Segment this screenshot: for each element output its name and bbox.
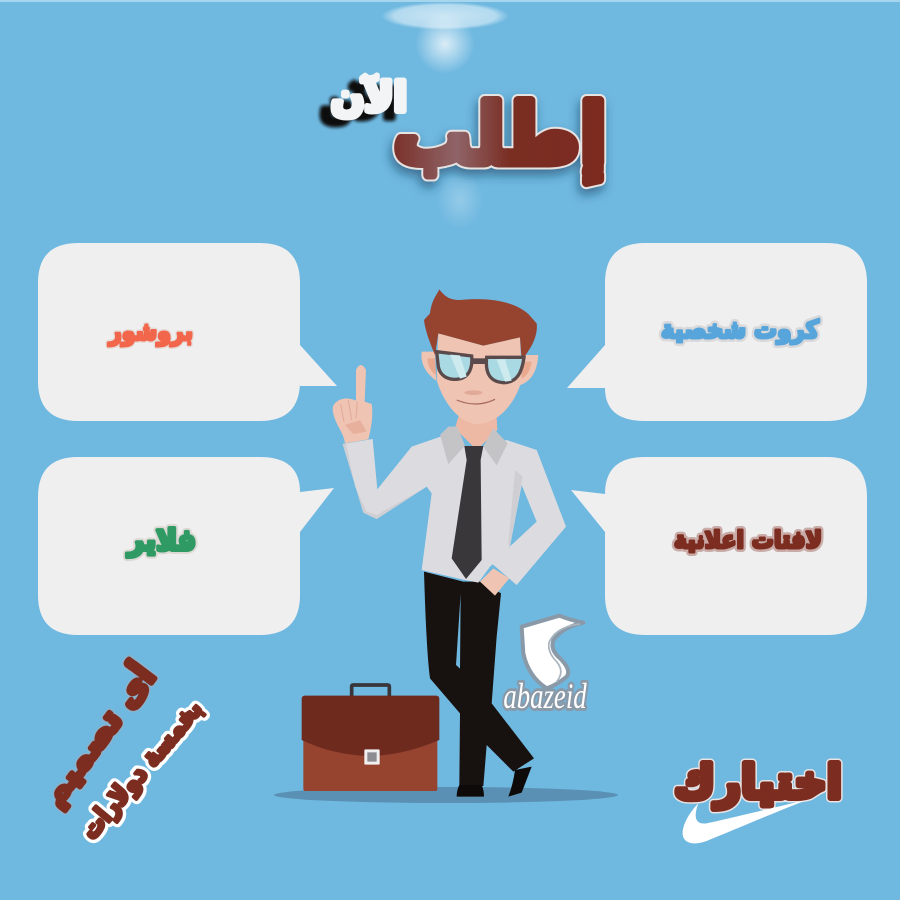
pocket hand: [480, 568, 509, 596]
flyer label: فلاير: [126, 523, 196, 557]
spotlight: [381, 2, 509, 230]
logo wordmark: abazeid: [503, 676, 587, 716]
man legs: [424, 572, 534, 797]
title shadow word: الآن: [320, 82, 396, 128]
pointing hand: [333, 365, 372, 443]
slogan: any design: أى تصميم: [31, 656, 163, 813]
flyer label: فلاير: [126, 523, 196, 557]
nose: [464, 390, 482, 395]
collar: [440, 427, 465, 464]
neck: [455, 417, 497, 450]
shirt: [343, 437, 566, 585]
title main word: إطلب: [394, 88, 606, 184]
icon: swoosh: [683, 800, 807, 843]
choice word: اختيارك: [674, 755, 842, 809]
slogan: five dollars: بخمسة دولارات: [75, 694, 209, 845]
man upper body: [333, 289, 566, 596]
ears: [421, 352, 436, 381]
title main word: إطلب: [394, 88, 606, 184]
choice word: اختيارك: [674, 755, 842, 809]
glasses: [437, 352, 524, 383]
banners label: لافتات اعلانية: [674, 526, 822, 554]
hair: [424, 289, 537, 360]
briefcase: [302, 685, 439, 791]
panel: brochure bubble: [38, 243, 337, 421]
logo shield: [522, 616, 583, 688]
face: [437, 333, 522, 424]
title: [320, 75, 606, 184]
panel: flyer bubble: [38, 457, 334, 635]
logo: abazeid: [503, 616, 587, 716]
panel: business cards bubble: [567, 243, 867, 421]
tie: [452, 446, 483, 579]
brochure label: بروشور: [107, 317, 193, 347]
man: [333, 289, 566, 797]
slogan: five dollars: بخمسة دولارات: [75, 694, 209, 845]
title small word: الآن: [331, 75, 407, 121]
your choice: [674, 755, 842, 843]
slogan: any design: أى تصميم: [31, 656, 163, 813]
brochure label: بروشور: [107, 317, 193, 347]
ground shadow: [274, 787, 618, 803]
business cards label: كروت شخصية: [661, 315, 819, 345]
panel: banners bubble: [571, 457, 867, 635]
smile: [457, 399, 495, 404]
banners label: لافتات اعلانية: [674, 526, 822, 554]
business cards label: كروت شخصية: [661, 315, 819, 345]
